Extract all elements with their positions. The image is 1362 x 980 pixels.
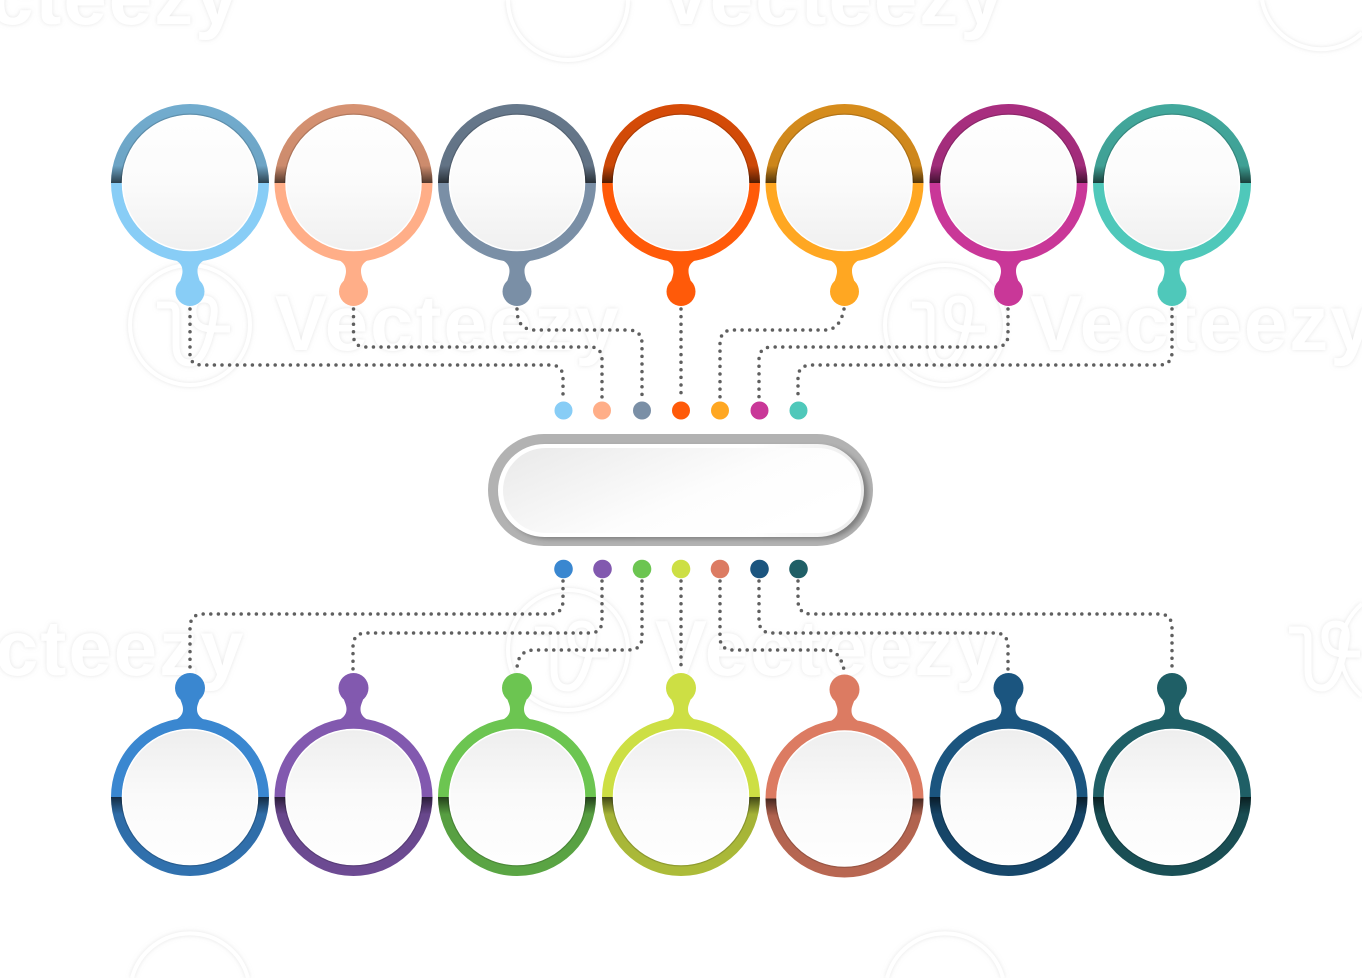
- bottom circle 3: green: [438, 673, 596, 876]
- top circle 3: slate: [438, 104, 596, 306]
- top circle 4: orange red: [602, 104, 760, 306]
- watermark pattern: Vecteezy: [655, 604, 1001, 692]
- watermark pattern: Vecteezy: [275, 279, 621, 367]
- bottom circle 4: lime: [602, 673, 760, 876]
- top circle 7: teal: [1093, 104, 1251, 306]
- bottom circle 6: navy: [930, 673, 1088, 876]
- bottom circle 2: purple: [274, 673, 432, 876]
- bottom circle 1: blue: [111, 673, 269, 876]
- top circle 5: amber: [766, 104, 924, 306]
- top circle 6: magenta: [930, 104, 1088, 306]
- bottom circle 7: dark teal: [1093, 673, 1251, 876]
- bottom connector dots: [554, 560, 808, 578]
- top circle 1: sky blue: [111, 104, 269, 306]
- dotted connectors: top row to hub: [190, 309, 1172, 400]
- dotted connectors: hub to bottom row: [190, 581, 1172, 670]
- top circle 2: peach: [274, 104, 432, 306]
- top connector dots: [554, 402, 808, 420]
- central hub pill: [488, 434, 873, 546]
- bottom circle 5: salmon: [766, 674, 924, 878]
- watermark pattern: cteezy: [0, 604, 246, 692]
